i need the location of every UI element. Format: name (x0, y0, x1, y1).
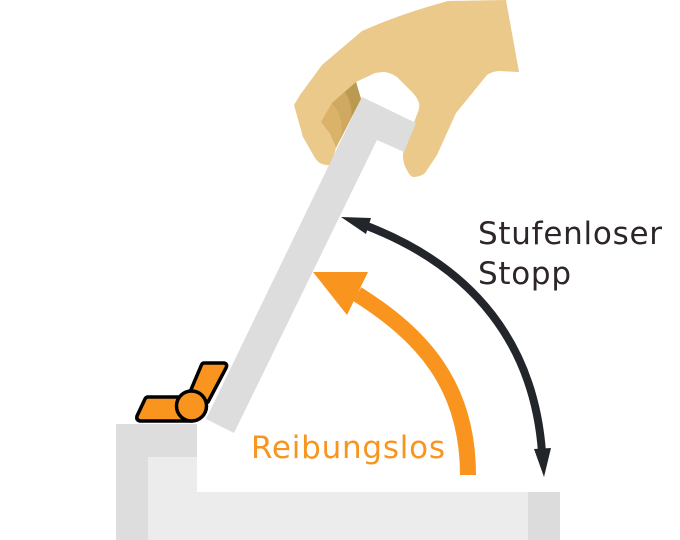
arrow: double-headed dark (341, 217, 551, 477)
finger shadow (321, 82, 361, 148)
label: Stufenloser Stopp: Stopp (478, 256, 571, 292)
label: Stufenloser Stopp (478, 216, 662, 292)
arrow: frictionless orange (313, 272, 468, 475)
icon: hand (294, 0, 519, 177)
label: Stufenloser Stopp: Stufenloser (478, 216, 662, 252)
base: frame (116, 424, 560, 540)
lid bar (206, 97, 416, 433)
icon: orange hinge (137, 363, 227, 421)
label: Reibungslos: Reibungslos (251, 430, 445, 466)
